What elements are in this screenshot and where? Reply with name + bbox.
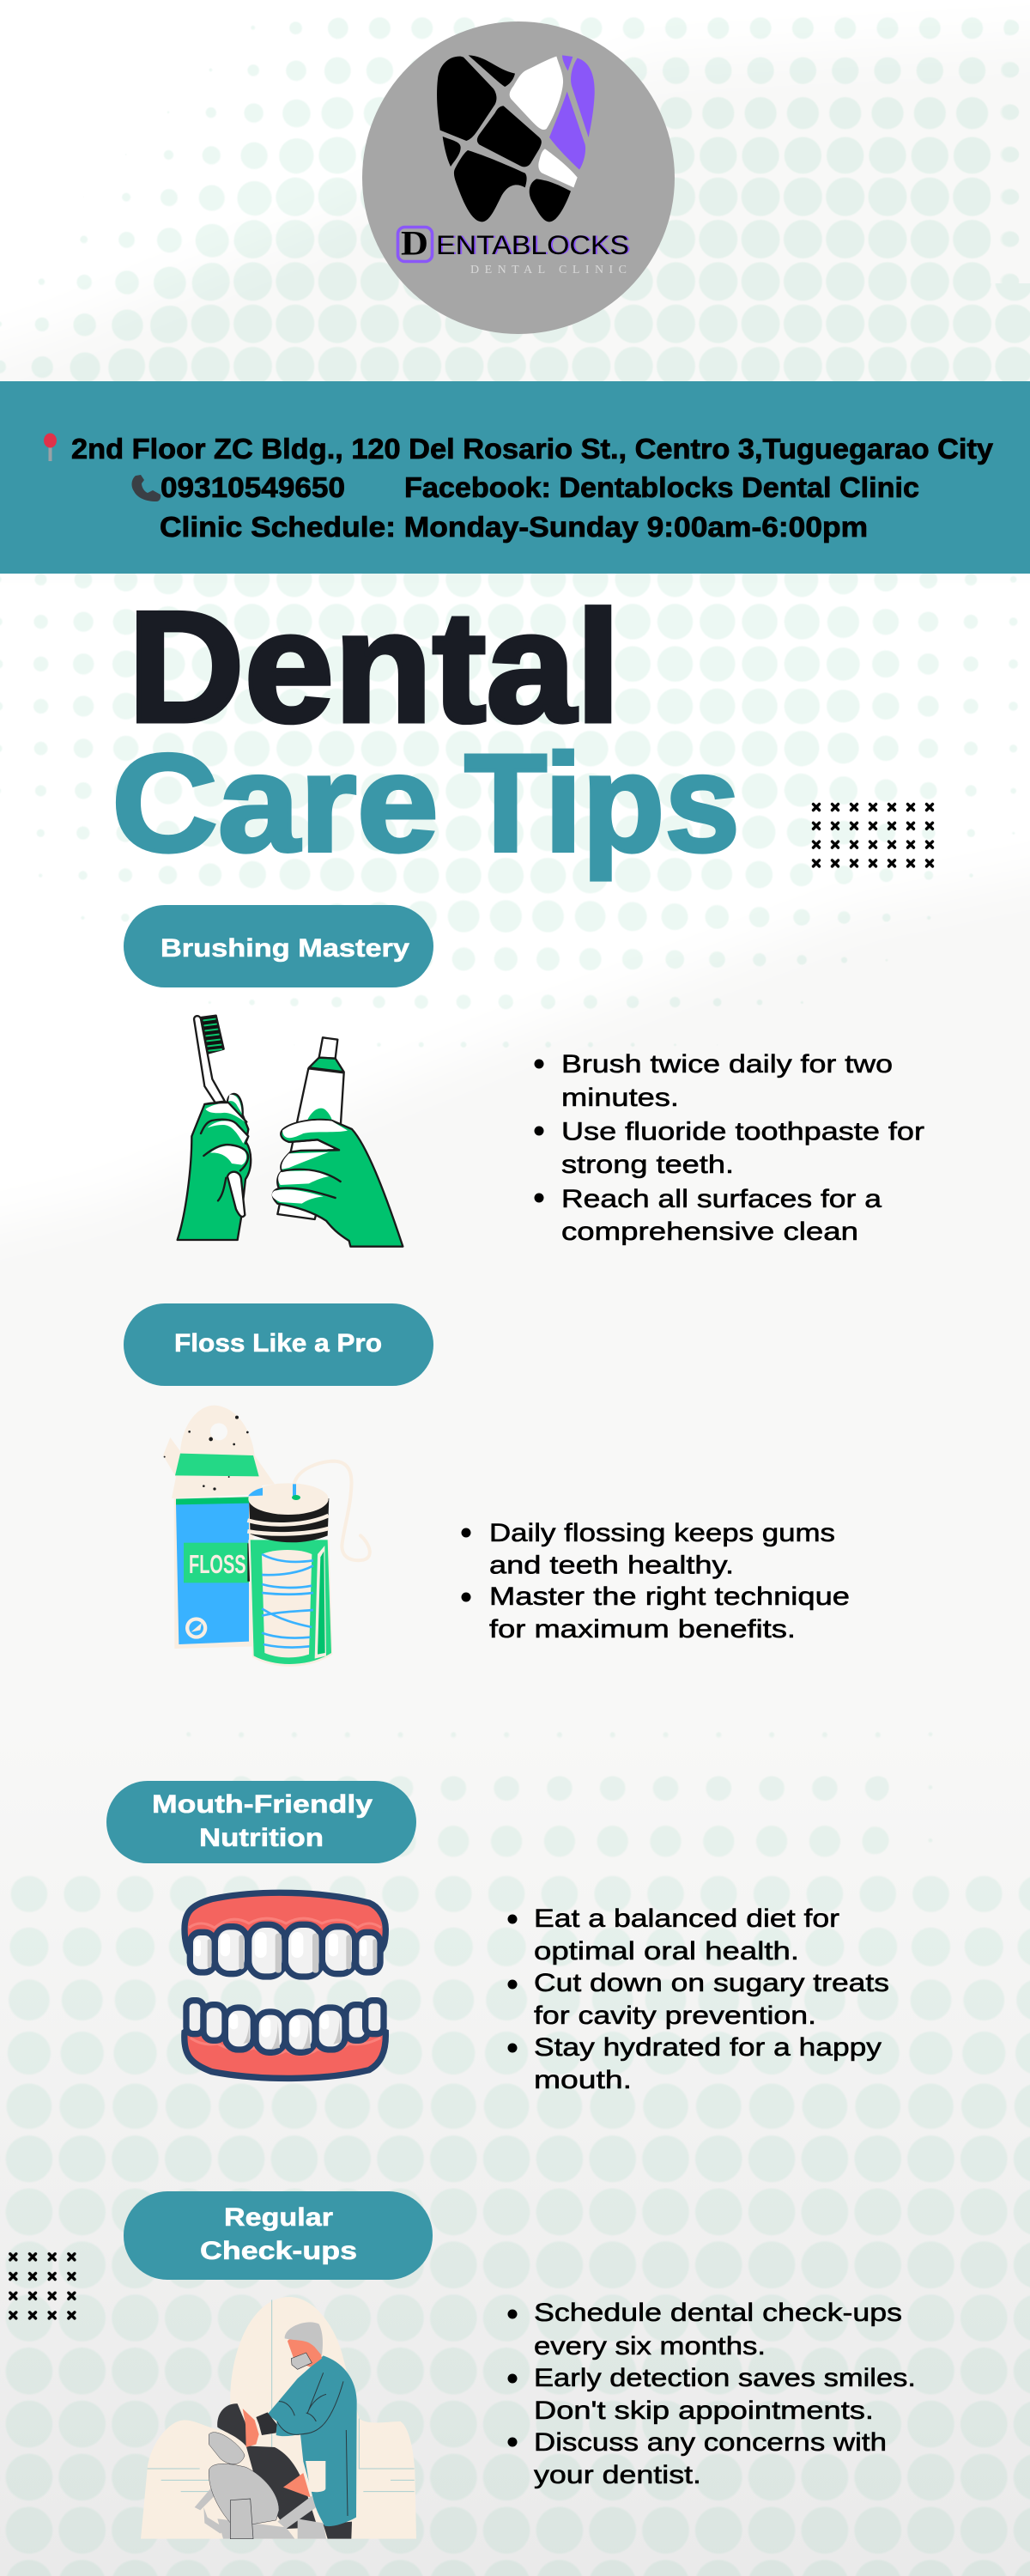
contact band (0, 381, 1030, 574)
logo: Dentablocks circle badge (362, 21, 675, 334)
title: Dental (128, 578, 621, 755)
pill heading (124, 905, 433, 987)
bullet list: Eat a balanced diet for (534, 1905, 839, 1933)
pill heading: Floss Like a Pro (174, 1329, 382, 1358)
pill heading: Nutrition (199, 1824, 324, 1852)
facebook: Facebook: Dentablocks Dental Clinic (404, 471, 919, 503)
bullet list: Don't skip appointments. (534, 2397, 874, 2425)
icon: map pin (44, 433, 57, 461)
pill heading (106, 1781, 416, 1863)
logo tagline: DENTAL CLINIC (470, 264, 627, 276)
logo wordmark: ENTABLOCKS (438, 229, 631, 260)
pill heading (124, 2191, 433, 2280)
icon: segmented tooth (437, 55, 595, 222)
cross pattern top right (807, 798, 939, 872)
panel: mouth-friendly nutrition (106, 1781, 889, 2094)
bullet list: and teeth healthy. (489, 1551, 734, 1579)
icon: phone (132, 475, 161, 501)
bullet list (462, 1519, 850, 1643)
bullet list: every six months. (534, 2332, 766, 2360)
pill heading: Brushing Mastery (161, 934, 409, 963)
cross pattern bottom left (3, 2247, 82, 2325)
bullet list: optimal oral health. (534, 1937, 799, 1965)
pill heading: Mouth-Friendly (152, 1790, 373, 1819)
bullet list: Daily flossing keeps gums (489, 1519, 835, 1547)
bullet list: for maximum benefits. (489, 1615, 796, 1643)
title: Care (112, 726, 439, 881)
pill heading: Check-ups (200, 2237, 357, 2265)
title: Tips (464, 726, 740, 881)
bullet list: minutes. (561, 1084, 679, 1112)
bullet list (508, 1905, 889, 2094)
schedule: Clinic Schedule: Monday-Sunday 9:00am-6:00pm (160, 511, 868, 543)
bullet list: your dentist. (534, 2461, 701, 2489)
bullet list: Schedule dental check-ups (534, 2299, 902, 2327)
bullet list: strong teeth. (561, 1151, 734, 1179)
bullet list (508, 2299, 916, 2489)
icon: hands with toothbrush and toothpaste (178, 1016, 403, 1247)
bullet list: mouth. (534, 2066, 632, 2094)
bullet list: comprehensive clean (561, 1218, 858, 1246)
panel: floss like a pro (124, 1303, 850, 1667)
logo wordmark: ENTABLOCKS (436, 229, 629, 260)
bullet list: Stay hydrated for a happy (534, 2033, 882, 2062)
bullet list: Use fluoride toothpaste for (561, 1118, 924, 1145)
panel: regular check-ups (124, 2191, 916, 2539)
pill heading: Regular (224, 2203, 333, 2232)
bullet list: Reach all surfaces for a (561, 1185, 882, 1213)
bullet list: for cavity prevention. (534, 2002, 816, 2030)
panel: brushing mastery (124, 905, 924, 1247)
bullet list: Cut down on sugary treats (534, 1969, 889, 1997)
label text: FLOSS (189, 1550, 246, 1579)
bullet list: Brush twice daily for two (561, 1050, 893, 1078)
icon: teeth and gums (185, 1893, 385, 2078)
pill heading (124, 1303, 433, 1386)
bullet list: Master the right technique (489, 1583, 850, 1611)
bullet list: Early detection saves smiles. (534, 2364, 916, 2392)
icon: floss box and dispenser (163, 1406, 370, 1667)
phone number: 09310549650 (161, 471, 345, 503)
bullet list: Discuss any concerns with (534, 2428, 887, 2457)
logo mark: D in rounded box: D (401, 224, 428, 263)
icon: dentist treating patient (141, 2297, 416, 2539)
address: 2nd Floor ZC Bldg., 120 Del Rosario St., Centro 3,Tuguegarao City (71, 433, 994, 465)
title (112, 578, 740, 881)
bullet list (534, 1050, 924, 1246)
